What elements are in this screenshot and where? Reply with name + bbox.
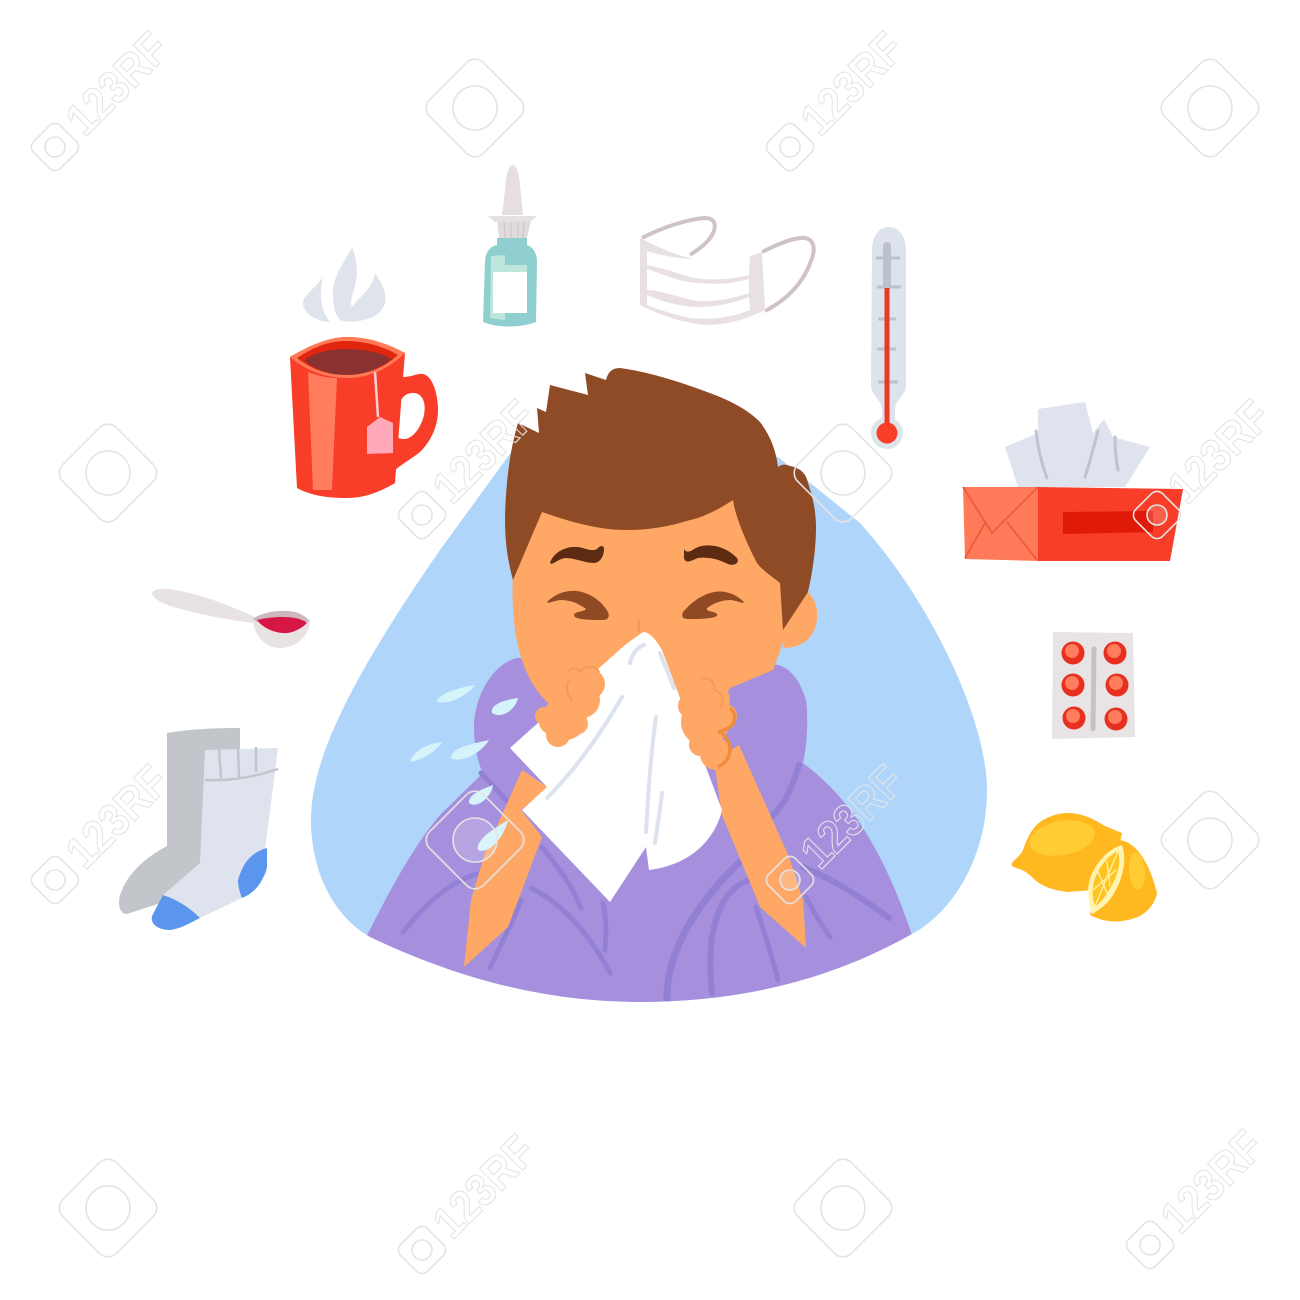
center groove bbox=[1093, 649, 1094, 729]
lemon slice bbox=[1088, 845, 1124, 914]
icon: lemons bbox=[1012, 813, 1157, 921]
watermarks: 123RF bbox=[790, 755, 913, 878]
tea bag string bbox=[375, 372, 378, 417]
cap ribs bbox=[504, 222, 524, 238]
icon: thermometer bbox=[871, 227, 906, 449]
box side bbox=[963, 487, 1038, 561]
tissue folds bbox=[1036, 431, 1118, 478]
nozzle bbox=[502, 165, 523, 215]
grey column bbox=[883, 242, 891, 290]
cut highlight bbox=[1127, 851, 1147, 891]
nose mark bbox=[638, 620, 640, 632]
icon: medicine spoon bbox=[152, 589, 310, 648]
icon: tea mug bbox=[290, 247, 438, 498]
watermarks: 123RF bbox=[1150, 1120, 1273, 1243]
sock cuff lines bbox=[205, 747, 278, 780]
tea bbox=[304, 349, 392, 375]
syrup bbox=[257, 617, 307, 633]
back sock bbox=[119, 728, 240, 914]
face bbox=[512, 490, 795, 730]
whole lemon bbox=[1012, 813, 1122, 892]
robe bbox=[362, 650, 918, 1010]
scale ticks bbox=[876, 258, 901, 382]
tissue creases bbox=[547, 645, 674, 843]
character: sneezing boy bbox=[362, 368, 918, 1010]
pills bbox=[1062, 642, 1128, 730]
mug highlight bbox=[308, 372, 337, 490]
icon: tissue box bbox=[963, 402, 1183, 561]
tissue bbox=[510, 632, 722, 902]
sock heel bbox=[238, 848, 267, 898]
robe creases bbox=[403, 765, 889, 1002]
pulp segments bbox=[1093, 851, 1118, 906]
red bulb bbox=[876, 422, 898, 444]
left hand bbox=[535, 667, 605, 747]
right squinting eye bbox=[682, 591, 744, 619]
right arm bbox=[714, 745, 806, 948]
bulb halo bbox=[871, 417, 903, 449]
slice pulp bbox=[1093, 851, 1119, 906]
tea bag bbox=[367, 417, 393, 454]
steam bbox=[303, 247, 385, 322]
front sock bbox=[152, 748, 278, 930]
left eyebrow bbox=[550, 546, 604, 564]
spoon bowl bbox=[253, 611, 310, 648]
left arm bbox=[464, 770, 549, 967]
box front bbox=[1038, 487, 1183, 561]
mug inside bbox=[297, 341, 398, 375]
icon: blister pack of pills bbox=[1052, 632, 1135, 739]
box slot bbox=[1063, 511, 1153, 534]
sneeze droplets bbox=[410, 685, 518, 851]
label bbox=[493, 272, 527, 313]
watermarks: 123RF bbox=[55, 22, 178, 145]
watermarks: 123RF bbox=[55, 755, 178, 878]
flange bbox=[488, 216, 537, 222]
spoon handle bbox=[152, 589, 255, 623]
mug handle hole bbox=[397, 393, 425, 439]
left squinting eye bbox=[547, 591, 609, 620]
sock toe bbox=[152, 895, 200, 930]
cut lemon back bbox=[1090, 840, 1157, 921]
icon: face mask bbox=[640, 218, 814, 325]
mask body bbox=[640, 238, 765, 325]
bowl lip bbox=[253, 611, 310, 622]
tissues bbox=[1005, 402, 1150, 487]
right eyebrow bbox=[684, 545, 738, 565]
blue background blob bbox=[311, 440, 987, 1002]
mug handle bbox=[393, 374, 438, 472]
cap bbox=[497, 220, 531, 238]
lemon highlight bbox=[1027, 816, 1097, 860]
watermarks: 123RF bbox=[422, 390, 545, 513]
watermarks: 123RF bbox=[790, 22, 913, 145]
icon: socks bbox=[119, 728, 278, 930]
mask panels bbox=[647, 251, 750, 319]
right hand bbox=[678, 678, 737, 770]
mask straps bbox=[642, 218, 814, 311]
watermarks: 123RF bbox=[422, 1125, 545, 1248]
icon: nasal spray bottle bbox=[483, 165, 537, 326]
red column bbox=[884, 288, 890, 428]
bottle body bbox=[483, 238, 537, 326]
hair bbox=[505, 368, 816, 630]
mug rim bbox=[290, 337, 405, 378]
mug body bbox=[290, 337, 405, 498]
envelope fold lines bbox=[963, 487, 1038, 560]
watermarks: 123RF bbox=[1157, 390, 1280, 513]
light stripe bbox=[490, 255, 527, 320]
glass tube bbox=[871, 227, 906, 425]
ear bbox=[783, 590, 817, 648]
blister sheet bbox=[1052, 632, 1135, 739]
